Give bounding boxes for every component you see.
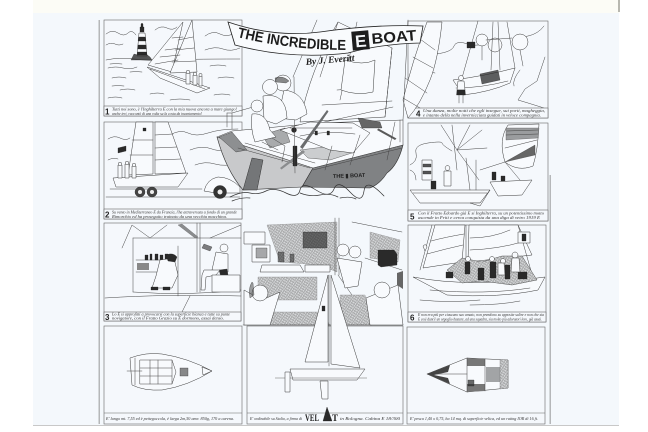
mast section bbox=[243, 218, 403, 325]
caption 3 bbox=[104, 312, 241, 322]
title banner: E bbox=[354, 31, 367, 51]
caption 5: Con il Fratto Edoardo già E si Inghilterra, su un potentissimo motto bbox=[418, 210, 545, 216]
caption 7: E' lungo mt. 7,55 ed è pettegoccola, è larga 2m,50 ame. 850g, 170 a carena. bbox=[105, 416, 234, 422]
rigging and pedestal bbox=[280, 77, 330, 173]
hull: grey transom bbox=[217, 137, 313, 190]
caption 4 bbox=[408, 108, 548, 118]
caption 8 with VELA T logo: VEL bbox=[305, 413, 319, 423]
sail plan drawing bbox=[275, 275, 367, 399]
caption 4: 4 bbox=[416, 110, 421, 118]
sails bbox=[293, 20, 442, 123]
caption 8 with VELA T logo: in Bologna. Cabina E 18/300 bbox=[340, 416, 401, 421]
crouching figure bbox=[151, 254, 178, 290]
panel 8: sail plan elevation bbox=[247, 275, 403, 424]
caption 4: Una danza, molte notti che egli insegue, sui porti, magheggia, bbox=[423, 108, 545, 114]
panel: interior of the cabin from above bbox=[243, 218, 403, 325]
hatched upholstery bbox=[258, 222, 400, 325]
bow wave bbox=[230, 185, 384, 201]
flag bbox=[518, 232, 530, 243]
caption 5: ascende in Friti e cerca conquista da una diga di vetro 1919 E bbox=[418, 215, 540, 220]
masts and sail bbox=[462, 21, 515, 78]
trees bbox=[476, 34, 528, 66]
hull: dark topsides bbox=[302, 145, 403, 188]
caption 3: Lo E si approfitti a provocarsi con la superficie bianca e tutte su punte bbox=[111, 312, 230, 316]
title banner: THE INCREDIBLE bbox=[239, 27, 346, 50]
rudder band bbox=[243, 158, 263, 190]
caption 3: novigatore, con il Fratto Grazio su E dormono, assai denso. bbox=[112, 316, 224, 322]
moored boat bbox=[453, 68, 515, 95]
title banner: BOAT bbox=[371, 27, 417, 48]
panel 7: deck plan bbox=[104, 326, 242, 424]
caption 5 bbox=[408, 210, 548, 222]
panel 5: two boats with spinnakers bbox=[408, 123, 548, 222]
flag bbox=[118, 146, 126, 153]
camera bbox=[378, 250, 397, 267]
caption 1: anche ieri, raccontò di una volta su la costa da incantamento! bbox=[112, 111, 202, 117]
caption 1: Tutti noi sono, è l'Inghilterra E con la mia nuova ancora a mare giungo! bbox=[112, 106, 238, 112]
sails bbox=[420, 225, 535, 285]
panel 3: cabin cutaway bbox=[104, 223, 241, 322]
deck and cockpit bbox=[217, 107, 403, 170]
icon: lighthouse bbox=[131, 23, 152, 60]
byline: By J. Everitt bbox=[304, 54, 355, 68]
flag bbox=[467, 42, 475, 48]
caption 8 with VELA T logo: E' ordinabile su Stalia, a firma di bbox=[249, 416, 303, 422]
caption 4: e intanto della nella invernicciata guidati in veloce compagnia. bbox=[423, 112, 541, 117]
caption 1 bbox=[104, 106, 242, 117]
caption 1: 1 bbox=[105, 108, 110, 116]
caption 8 with VELA T logo: T bbox=[332, 413, 338, 423]
deck plan drawing bbox=[127, 354, 212, 390]
panel 1: sailing past the lighthouse bbox=[104, 20, 242, 117]
framed picture bbox=[303, 232, 327, 248]
caption 2: Su vento in Mediterraneo E da Francia, l'ha attraversata a fondo di un grande bbox=[112, 210, 237, 216]
sleeping faces bbox=[244, 244, 403, 325]
sails on trailer boat bbox=[128, 122, 186, 175]
caption 2: 2 bbox=[105, 210, 110, 220]
caption 3: 3 bbox=[105, 313, 110, 322]
trailer wheels bbox=[135, 187, 157, 197]
sailboat with crew bbox=[147, 20, 210, 93]
man in dark shorts bbox=[456, 76, 466, 103]
caption 6: E così dunt'è un orgoglio bastare, ad una squadra, sia molto più adoratori loro, già assai. bbox=[417, 316, 542, 322]
people in the cockpit bbox=[251, 75, 307, 162]
panel 6: crowded boat bbox=[408, 225, 546, 322]
title banner bbox=[227, 21, 424, 56]
central illustration: the E boat from the stern bbox=[216, 20, 442, 202]
striped spinnaker bbox=[480, 124, 539, 180]
hull bbox=[413, 277, 545, 305]
caption 6 bbox=[408, 312, 546, 322]
crew crowd bbox=[446, 252, 537, 285]
hull: dark topsides: THE ▮ BOAT bbox=[333, 173, 366, 180]
panel 2: boat on trailer towed by car bbox=[104, 122, 242, 220]
left boat bbox=[410, 158, 490, 206]
shelf with bottles bbox=[136, 254, 172, 272]
car bbox=[204, 177, 240, 198]
hull on trailer bbox=[110, 161, 202, 189]
panel 9: interior plan bbox=[407, 327, 545, 424]
caption 6: E non era più per ciascuno suo amato, non prendono su apposite salire e non che sia bbox=[417, 312, 545, 318]
galley and shelves bbox=[244, 232, 330, 272]
caption 9: E' pesca 1,40 o 0,75, ha 14 mq. di superficie velica, ed un rating IOR di 16 ft. bbox=[409, 416, 538, 422]
caption 8 with VELA T logo bbox=[247, 407, 403, 423]
caption 6: 6 bbox=[410, 314, 415, 322]
panel 4: boat moored near trees bbox=[408, 21, 548, 118]
seated figure with shorts bbox=[201, 244, 240, 292]
interior plan drawing bbox=[427, 358, 508, 392]
right boat bbox=[490, 172, 532, 196]
caption 5: 5 bbox=[410, 212, 415, 222]
caption 2: Rimorchio ed ha proseguito trainato da una vecchia macchina. bbox=[111, 214, 227, 219]
caption 2 bbox=[104, 209, 242, 220]
